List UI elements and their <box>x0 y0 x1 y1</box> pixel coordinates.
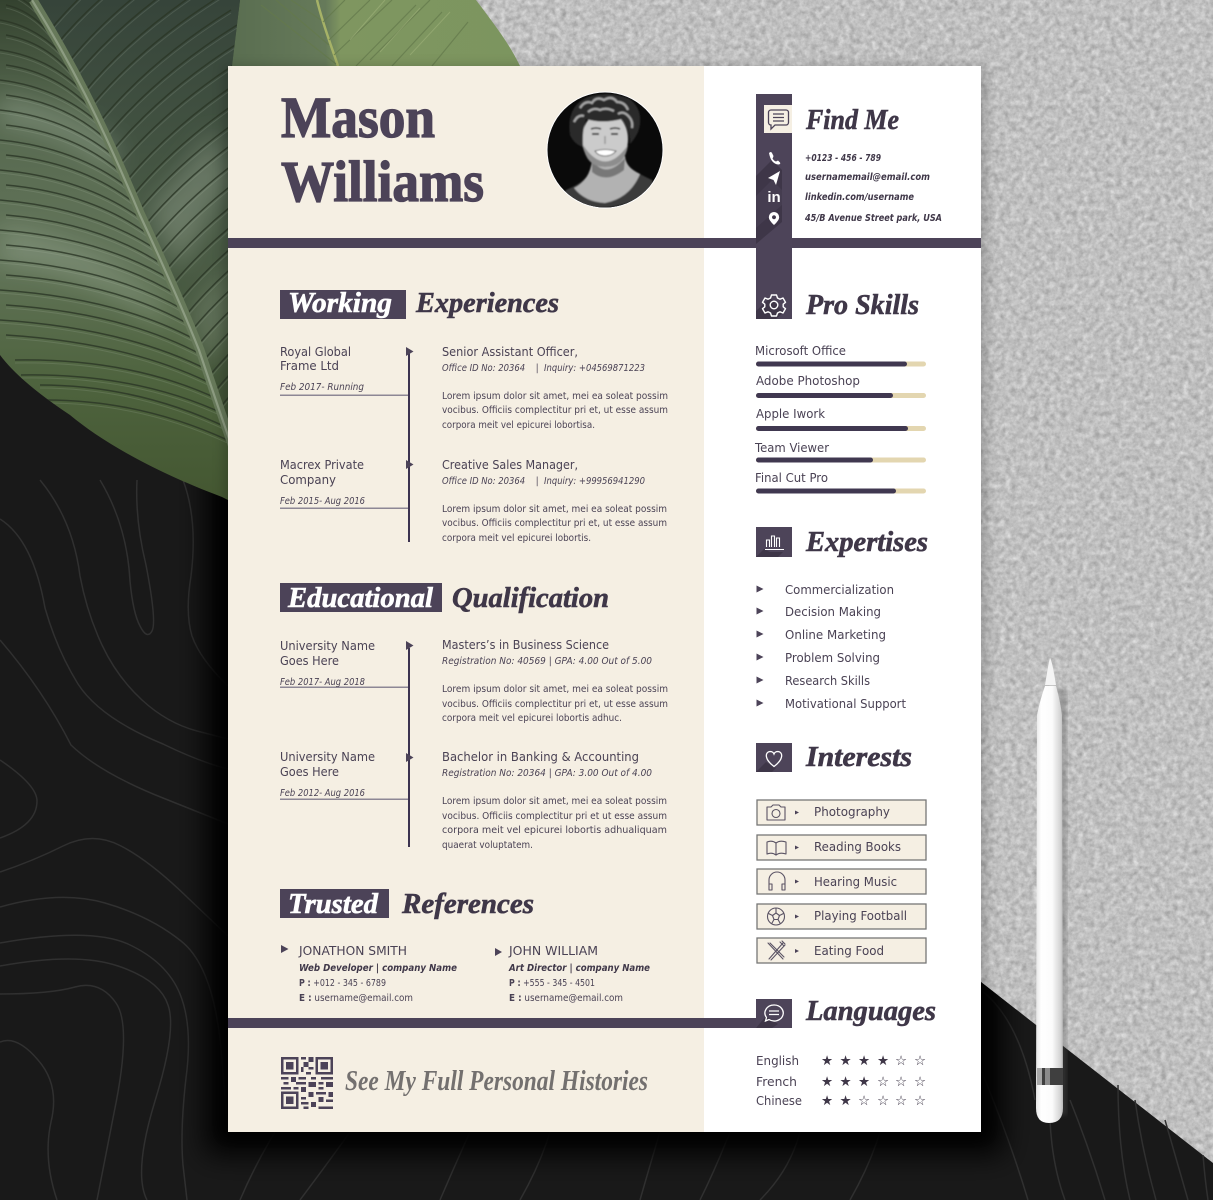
background: large dark green leaf <box>0 0 240 500</box>
education 2: University Name <box>280 750 375 764</box>
language: English: ★ <box>858 1053 870 1069</box>
language: English: ☆ <box>895 1053 907 1069</box>
experience 1: vocibus. Officiis complectitur pri et, ut esse assum <box>442 405 668 416</box>
reference 2: E : username@email.com <box>509 993 623 1004</box>
contact details: usernamemail@email.com <box>805 172 930 183</box>
heading: Pro Skills: Pro Skills <box>805 289 919 321</box>
panel: white right column <box>704 66 981 1132</box>
education 2 <box>280 750 667 851</box>
experience 2: corpora meit vel epicurei lobortis. <box>442 533 591 544</box>
education 2: Registration No: 20364 | GPA: 3.00 Out of 4.00 <box>442 768 652 779</box>
experience 2: Office ID No: 20364 | Inquiry: +99956941290 <box>442 476 645 487</box>
language: Chinese: ☆ <box>858 1093 870 1109</box>
heading: Educational Qualification: Qualification <box>452 582 609 614</box>
reference 1: JONATHON SMITH <box>298 944 407 958</box>
reference 1 <box>281 944 458 1004</box>
heading: Working Experiences <box>280 287 559 319</box>
icon: heart badge <box>756 743 792 772</box>
experience 1: Royal Global <box>280 345 351 359</box>
skill: Microsoft Office: Microsoft Office <box>755 344 846 358</box>
expertise list: Research Skills <box>785 674 870 688</box>
background: second light green leaf <box>228 0 524 70</box>
heading: Working Experiences: Working <box>288 287 392 319</box>
interest: Photography <box>757 800 926 825</box>
language: French: ☆ <box>914 1074 926 1090</box>
contact details: linkedin.com/username <box>805 192 914 203</box>
language: French: French <box>756 1075 797 1089</box>
icon: phone <box>769 152 780 164</box>
footer call to action: See My Full Personal Histories <box>345 1066 648 1097</box>
language: English: ☆ <box>914 1053 926 1069</box>
interest: Hearing Music <box>757 869 926 894</box>
expertise list: Problem Solving <box>785 651 880 665</box>
language: Chinese: ★ <box>839 1093 852 1109</box>
education 1: vocibus. Officiis complectitur pri et, ut esse assum <box>442 699 668 710</box>
skill: Team Viewer <box>754 441 926 462</box>
contact details: 45/B Avenue Street park, USA <box>804 213 942 224</box>
experience 1: Feb 2017- Running <box>280 382 364 393</box>
experience 2: Company <box>280 473 336 487</box>
education 1: Lorem ipsum dolor sit amet, mei ea soleat possim <box>442 684 668 695</box>
skill: Microsoft Office <box>755 344 926 366</box>
skill bars <box>754 344 926 494</box>
interest boxes <box>757 800 926 963</box>
skill: Team Viewer: Team Viewer <box>754 441 829 455</box>
interest: Playing Football <box>757 904 926 929</box>
language: English: English <box>756 1054 799 1068</box>
reference 2: JOHN WILLIAM <box>508 944 598 958</box>
expertise list: Decision Making <box>785 605 881 619</box>
reference 1: P : +012 - 345 - 6789 <box>299 978 386 989</box>
skill: Apple Iwork: Apple Iwork <box>756 407 825 421</box>
experience 2: Feb 2015- Aug 2016 <box>280 496 365 507</box>
experience 2 <box>280 458 667 544</box>
portrait photo <box>546 92 664 212</box>
title: name <box>281 85 484 214</box>
icon: chat bubble <box>764 105 792 133</box>
heading: Educational Qualification: Educational <box>287 582 434 614</box>
language: Chinese: ★ <box>821 1093 833 1109</box>
reference 2 <box>495 944 651 1004</box>
language: Chinese <box>756 1093 926 1109</box>
heading: Languages: Languages <box>805 995 936 1027</box>
language: English: ★ <box>877 1053 889 1069</box>
skill: Apple Iwork <box>756 407 926 431</box>
heading: Trusted References: Trusted <box>288 888 378 920</box>
language: French <box>756 1074 926 1090</box>
icon: paper plane <box>768 171 780 185</box>
education 2: Feb 2012- Aug 2016 <box>280 788 365 799</box>
experience 1: Lorem ipsum dolor sit amet, mei ea soleat possim <box>442 391 668 402</box>
reference 2: P : +555 - 345 - 4501 <box>509 978 595 989</box>
language: Chinese: ☆ <box>895 1093 907 1109</box>
language: French: ★ <box>858 1074 870 1090</box>
interest: Hearing Music: Hearing Music <box>814 875 897 889</box>
interest: Reading Books: Reading Books <box>814 840 901 854</box>
expertise list: Online Marketing <box>785 628 886 642</box>
paper: resume <box>228 66 981 1132</box>
language: Chinese: ☆ <box>914 1093 926 1109</box>
skill: Final Cut Pro <box>755 471 926 494</box>
experience 2: vocibus. Officiis complectitur pri et, ut esse assum <box>442 518 667 529</box>
language: French: ★ <box>821 1074 833 1090</box>
experience timeline <box>280 347 414 542</box>
interest: Eating Food <box>757 938 926 963</box>
language: French: ☆ <box>877 1074 889 1090</box>
icon: linkedin: in <box>767 189 781 206</box>
sidebar band with contact icons <box>756 94 792 319</box>
language: Chinese: Chinese <box>756 1094 802 1108</box>
heading: Educational Qualification <box>280 582 609 614</box>
skill: Adobe Photoshop: Adobe Photoshop <box>756 374 860 388</box>
heading: Working Experiences: Experiences <box>415 287 559 319</box>
education 2: corpora meit vel epicurei lobortis adhualiquam <box>442 825 667 836</box>
panel: beige left column <box>228 66 704 1132</box>
icon: bar chart badge <box>756 527 792 557</box>
heading: Expertises: Expertises <box>805 526 928 558</box>
language: French: ☆ <box>895 1074 907 1090</box>
education 1: Goes Here <box>280 654 339 668</box>
contact details: +0123 - 456 - 789 <box>805 153 881 164</box>
experience 2: Macrex Private <box>280 458 364 472</box>
interest: Reading Books <box>757 835 926 860</box>
skill: Final Cut Pro: Final Cut Pro <box>755 471 828 485</box>
title: name: Williams <box>281 149 484 214</box>
education 2: Lorem ipsum dolor sit amet, mei ea soleat possim <box>442 796 667 807</box>
reference 1: E : username@email.com <box>299 993 413 1004</box>
experience 1: Senior Assistant Officer, <box>442 345 578 359</box>
expertise list: Commercialization <box>785 583 894 597</box>
heading: Interests: Interests <box>805 741 912 773</box>
language ratings <box>756 1053 926 1109</box>
icon: speech badge <box>756 999 792 1028</box>
education 2: vocibus. Officiis complectitur pri et ut esse assum <box>442 811 667 822</box>
expertise list <box>756 583 906 711</box>
education 2: Goes Here <box>280 765 339 779</box>
language: English: ★ <box>839 1053 852 1069</box>
education 1: University Name <box>280 639 375 653</box>
reference 1: Web Developer | company Name <box>299 963 458 974</box>
education 1: corpora meit vel epicurei lobortis adhuc. <box>442 713 622 724</box>
QR code <box>281 1057 333 1109</box>
experience 1: corpora meit vel epicurei lobortisa. <box>442 420 595 431</box>
bottom divider bar <box>228 1018 758 1028</box>
paper shadow <box>224 66 986 1136</box>
heading: Find Me: Find Me <box>805 104 899 136</box>
interest: Eating Food: Eating Food <box>814 944 884 958</box>
experience 1 <box>280 345 668 431</box>
icon: map pin <box>769 212 779 225</box>
title: name: Mason <box>281 85 435 150</box>
reference 2: Art Director | company Name <box>508 963 651 974</box>
education timeline <box>280 641 414 847</box>
education 1 <box>280 638 668 724</box>
heading: Trusted References <box>280 888 534 920</box>
experience 1: Office ID No: 20364 | Inquiry: +04569871223 <box>442 363 645 374</box>
education 1: Masters’s in Business Science <box>442 638 609 652</box>
interest: Playing Football: Playing Football <box>814 909 907 923</box>
education 1: Feb 2017- Aug 2018 <box>280 677 365 688</box>
pencil <box>1036 658 1067 1123</box>
experience 2: Lorem ipsum dolor sit amet, mei ea soleat possim <box>442 504 667 515</box>
top divider bar <box>228 238 981 248</box>
language: Chinese: ☆ <box>877 1093 889 1109</box>
language: French: ★ <box>839 1074 852 1090</box>
skill: Adobe Photoshop <box>756 374 926 398</box>
heading: Trusted References: References <box>401 888 534 920</box>
contact details <box>804 153 942 224</box>
education 2: quaerat voluptatem. <box>442 840 533 851</box>
education 1: Registration No: 40569 | GPA: 4.00 Out of 5.00 <box>442 656 652 667</box>
language: English: ★ <box>821 1053 833 1069</box>
background: black topographic surface <box>0 355 1213 1200</box>
experience 2: Creative Sales Manager, <box>442 458 578 472</box>
education 2: Bachelor in Banking & Accounting <box>442 750 639 764</box>
interest: Photography: Photography <box>814 805 890 819</box>
language: English <box>756 1053 926 1069</box>
expertise list: Motivational Support <box>785 697 906 711</box>
icon: gear <box>762 295 786 316</box>
experience 1: Frame Ltd <box>280 359 339 373</box>
